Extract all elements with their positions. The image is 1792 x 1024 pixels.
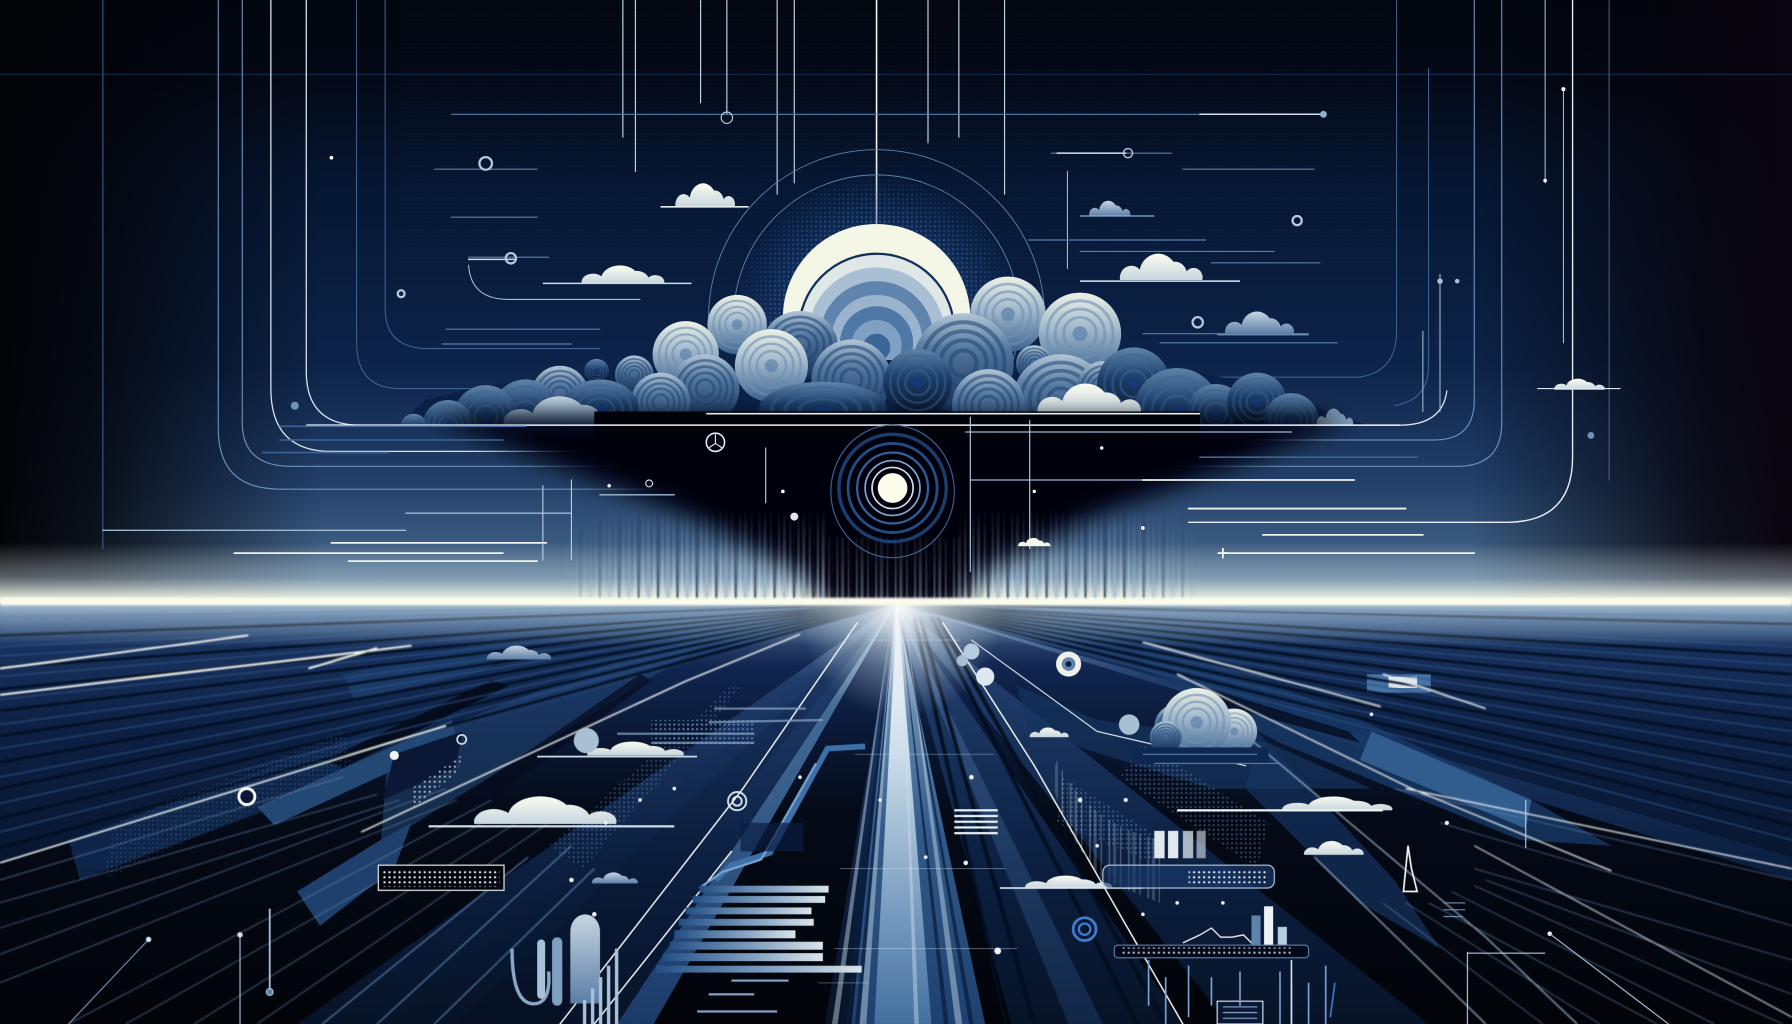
sky background: [0, 0, 1792, 606]
layered cloud mass: [398, 277, 1368, 455]
cloud base band: [306, 411, 1400, 439]
left landscape clouds: [429, 646, 697, 883]
stacked bars: [656, 886, 862, 1011]
capsule and hook shapes: [512, 914, 600, 1006]
right landscape small clouds: [957, 643, 1392, 888]
right landscape big cloud: [1119, 688, 1280, 763]
curved fence of data: [1051, 760, 1160, 903]
perspective streak lines right: [896, 603, 1792, 1024]
small clouds in sky: [543, 183, 1621, 390]
rounded glass panel: [1103, 865, 1274, 888]
blue panel bands right: [1017, 640, 1611, 949]
small rings and dots in sky: [291, 87, 1594, 439]
striped block on road: [954, 809, 998, 834]
sun halo: [708, 149, 1044, 360]
perspective ground sectors: [0, 603, 1792, 1024]
vertical data rain stripes: [579, 515, 1193, 600]
blue ring target: [1073, 918, 1096, 941]
bars on right panel: [1154, 831, 1206, 858]
blue stair circuit: [617, 709, 865, 888]
ground base: [0, 603, 1792, 1024]
scattered bright dots on ground: [569, 712, 1373, 954]
blue panel bands left: [69, 617, 749, 926]
horizontal data lines in sky: [434, 114, 1337, 344]
glowing sun with rings: [783, 224, 970, 411]
light foreground clouds: [504, 383, 1141, 424]
horizontal data lines around core: [103, 417, 1474, 571]
dotted grid box: [378, 865, 504, 890]
perspective streak lines left: [0, 603, 896, 1024]
horizon line: [0, 598, 1792, 606]
dotted panels: [103, 686, 1269, 880]
mini line and bar chart right: [1114, 906, 1309, 958]
right outline details: [1403, 800, 1669, 1024]
central target rings: [831, 425, 954, 558]
pale horizon glow: [0, 543, 1792, 606]
mini bar chart left: [583, 949, 618, 1024]
ring near horizon: [1056, 651, 1081, 677]
horizon glow overlays: [0, 603, 1792, 729]
document box: [1217, 1001, 1263, 1024]
central light road: [818, 603, 1017, 1024]
bright rail lines: [560, 623, 1246, 1024]
pin lines left: [69, 909, 273, 1024]
small symbols around core: [607, 433, 1145, 546]
ring on left panel: [239, 735, 746, 810]
dark void under cloud: [434, 418, 1349, 611]
circuit-style frame lines: [0, 0, 1792, 549]
vertical light bars bottom right: [1149, 960, 1335, 1024]
